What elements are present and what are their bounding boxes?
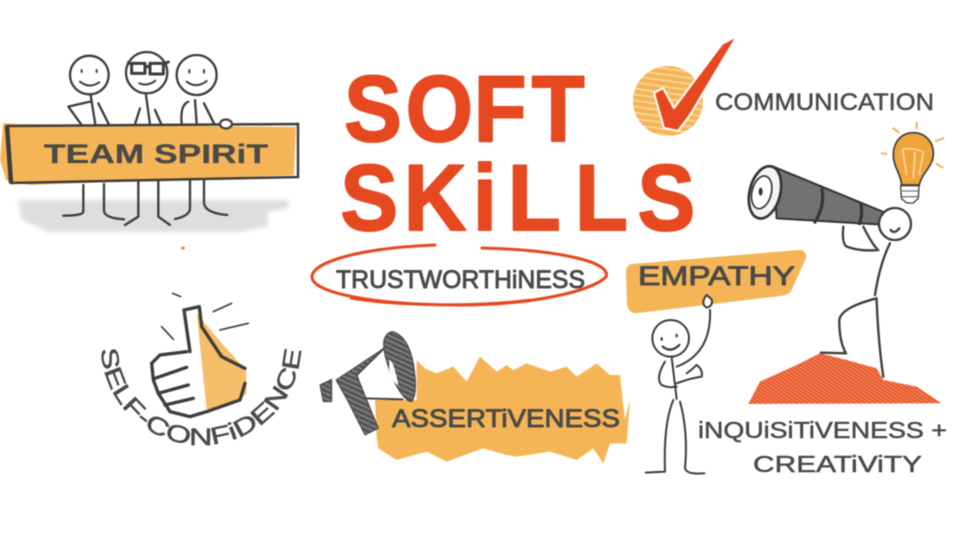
self-confidence thumbs up [100, 292, 302, 446]
label: assertiveness: ASSERTiVENESS [392, 405, 620, 433]
red hand-drawn ellipse [312, 245, 606, 305]
trustworthiness oval [312, 245, 606, 305]
thumb icon [152, 293, 248, 417]
label: team spirit: TEAM SPIRiT [44, 139, 269, 169]
hand on sign [220, 120, 232, 128]
empathy badge [626, 250, 806, 313]
team spirit group [0, 52, 298, 232]
small orange dot [181, 246, 185, 250]
checkmark icon [633, 36, 737, 136]
soft: SOFT [344, 57, 585, 162]
three stick figures [63, 52, 227, 225]
line one: iNQUiSiTiVENESS + [698, 417, 947, 443]
title: soft skills [340, 57, 695, 251]
ground shadow [18, 200, 289, 232]
yellow scribble background [320, 332, 630, 463]
label: trustworthiness: TRUSTWORTHiNESS [336, 266, 585, 294]
telescope [744, 163, 888, 225]
stick person [821, 208, 911, 377]
badge shape [626, 250, 806, 313]
red check [654, 36, 737, 131]
curved label: self-confidence: SELF-CONFiDENCE [100, 348, 302, 446]
megaphone [320, 332, 415, 435]
label: inquisitiveness + creativity [698, 417, 947, 477]
assertiveness with megaphone [320, 332, 630, 463]
sign board [0, 123, 296, 185]
mountain [748, 353, 942, 404]
telescope figure [744, 123, 943, 404]
line two: CREATiViTY [753, 451, 922, 477]
skills: SKiLLS [340, 146, 695, 251]
label: communication: COMMUNICATION [715, 89, 934, 116]
label: empathy: EMPATHY [638, 261, 795, 291]
hatched circle [633, 66, 703, 136]
light bulb [882, 123, 943, 203]
pointing stick person [646, 295, 712, 474]
